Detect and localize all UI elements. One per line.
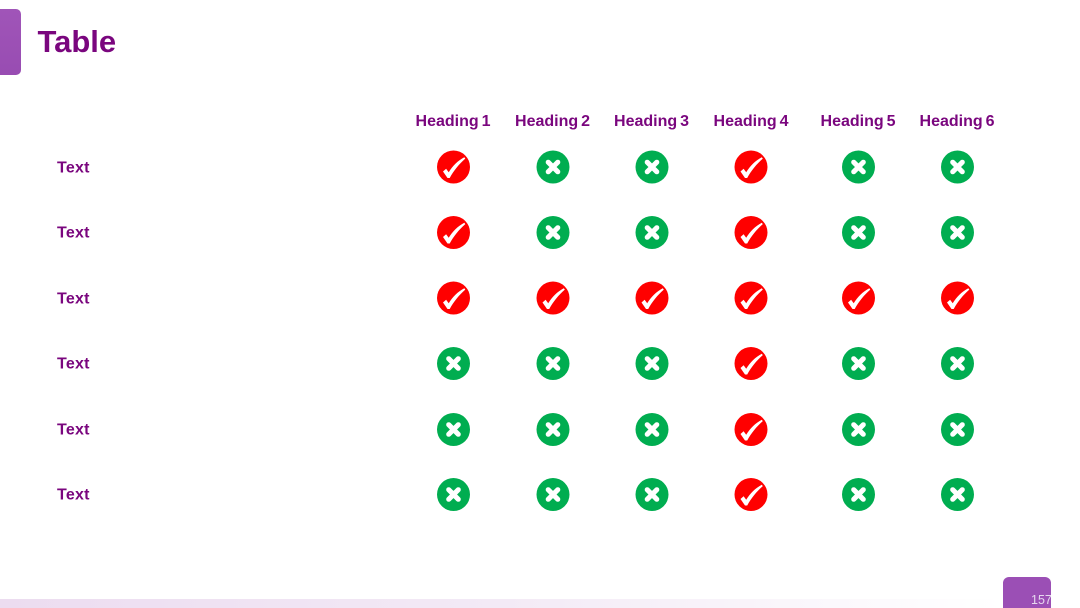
- row 4: Text: [57, 356, 90, 372]
- title accent tab: [0, 9, 21, 75]
- column headings: Heading 2: [515, 113, 590, 130]
- row 4: [57, 347, 974, 380]
- page number tab: 157: [1031, 593, 1052, 607]
- row 6: [57, 478, 974, 511]
- column headings: Heading 5: [821, 113, 896, 130]
- row 5: Text: [57, 422, 90, 438]
- row 6: Text: [57, 486, 90, 504]
- column headings: Heading 6: [920, 113, 995, 130]
- column headings: Heading 1: [416, 113, 491, 130]
- column headings: Heading 3: [614, 113, 689, 130]
- footer gradient band: [0, 599, 1003, 608]
- row 2: [57, 216, 974, 249]
- title: Table: [38, 24, 116, 59]
- column headings: Heading 4: [714, 113, 789, 130]
- row 2: Text: [57, 224, 90, 242]
- row 3: Text: [57, 290, 90, 308]
- row 5: [57, 413, 974, 446]
- row 1: Text: [57, 160, 90, 176]
- row 3: [57, 282, 974, 314]
- row 1: [57, 150, 974, 184]
- column headings: [416, 113, 995, 130]
- page number tab: [1003, 577, 1052, 608]
